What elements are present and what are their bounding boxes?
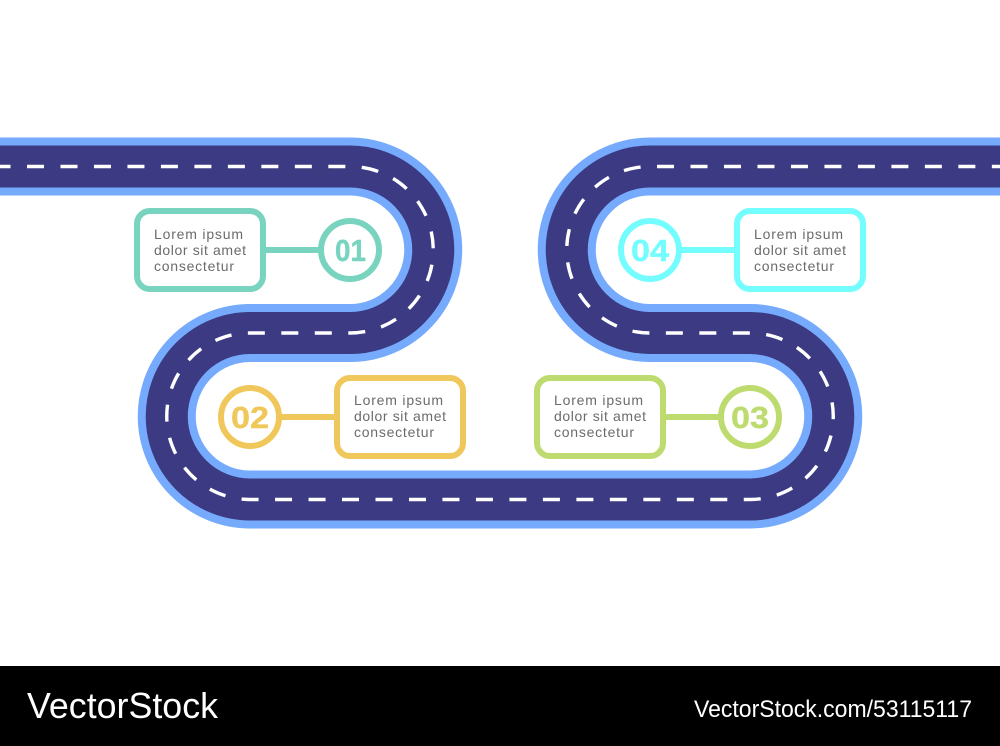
step 03 callout — [537, 378, 779, 456]
step 01 callout — [137, 211, 379, 289]
step 04 callout: dolor sit amet — [754, 242, 846, 258]
step 02 callout: dolor sit amet — [354, 408, 446, 424]
step 01 callout: consectetur — [154, 258, 234, 274]
step 02 callout: consectetur — [354, 424, 434, 440]
step 03 callout: dolor sit amet — [554, 408, 646, 424]
step 04 callout: consectetur — [754, 258, 834, 274]
step 02 callout — [221, 378, 463, 456]
footer bar — [0, 666, 1000, 746]
step 03 callout: Lorem ipsum — [554, 392, 643, 408]
step 01 callout: dolor sit amet — [154, 242, 246, 258]
step 04 callout: Lorem ipsum — [754, 226, 843, 242]
step 04 callout: 04 — [631, 233, 670, 268]
step 02 callout: 02 — [231, 400, 269, 435]
step 03 callout: 03 — [731, 400, 769, 435]
footer bar: VectorStock.com/53115117 — [694, 696, 972, 723]
step 03 callout: consectetur — [554, 424, 634, 440]
step 02 callout: Lorem ipsum — [354, 392, 443, 408]
step 01 callout: 01 — [335, 233, 366, 268]
step 04 callout — [621, 211, 863, 289]
step 01 callout: Lorem ipsum — [154, 226, 243, 242]
footer bar: VectorStock — [27, 685, 219, 726]
winding road — [0, 166, 1000, 500]
